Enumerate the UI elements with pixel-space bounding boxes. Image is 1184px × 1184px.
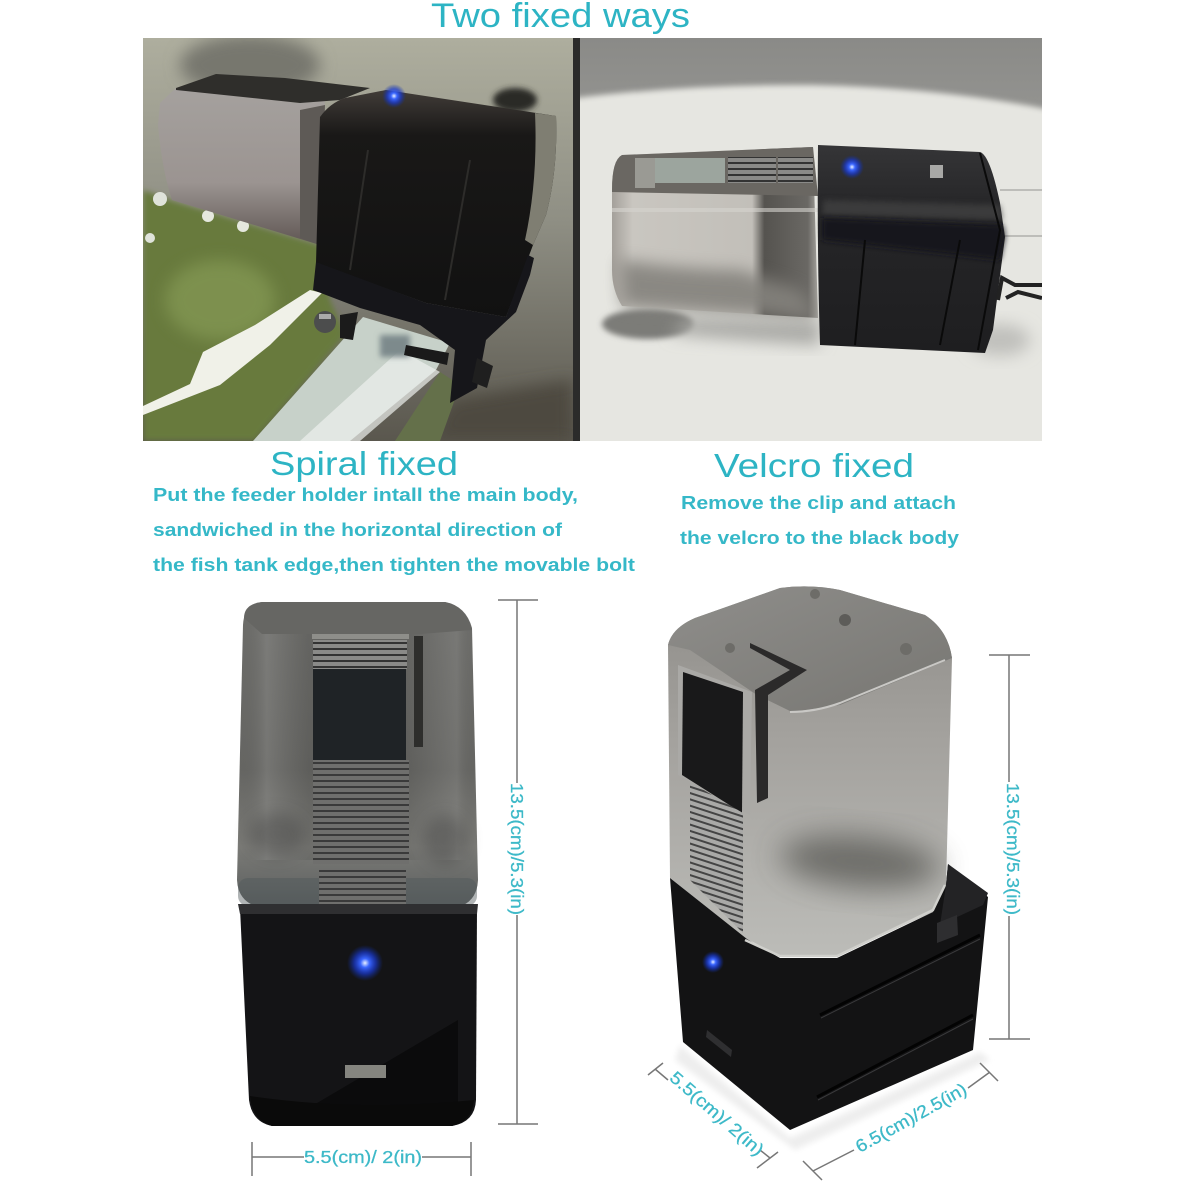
dimension: angled height (989, 655, 1030, 1039)
text block: spiral instructions: the fish tank edge,then tighten the movable bolt (153, 554, 635, 575)
text block: velcro instructions: the velcro to the black body (680, 527, 960, 548)
hopper (612, 147, 818, 318)
dimension: angled left depth (648, 1063, 778, 1168)
text block: spiral instructions (153, 484, 635, 575)
silver hopper (170, 89, 316, 244)
black base (670, 864, 988, 1130)
black body (316, 90, 556, 317)
dimension: front width: 5.5(cm)/ 2(in) (304, 1147, 422, 1167)
clip and bolt (313, 255, 534, 403)
panel: velcro fixed photo (580, 38, 1042, 441)
dimension: angled left depth: 5.5(cm)/ 2(in) (666, 1067, 768, 1160)
dimension: front width (252, 1142, 471, 1176)
text block: spiral instructions: Put the feeder holder intall the main body, (153, 484, 578, 505)
glass rail (253, 317, 450, 441)
dimension: angled right width (803, 1063, 998, 1180)
black base (818, 145, 1005, 353)
text block: velcro instructions: Remove the clip and attach (681, 492, 956, 513)
product: angled view feeder (668, 586, 990, 1150)
dimension: front height: 13.5(cm)/5.3(in) (507, 783, 527, 915)
heading: spiral fixed: Spiral fixed (270, 445, 458, 482)
heading: velcro fixed: Velcro fixed (714, 447, 914, 484)
panel: spiral fixed photo (143, 35, 573, 441)
dimension: front height (498, 600, 538, 1124)
text block: spiral instructions: sandwiched in the horizontal direction of (153, 519, 563, 540)
dimension: angled height: 13.5(cm)/5.3(in) (1003, 783, 1023, 915)
divider strip (573, 38, 580, 441)
text block: velcro instructions (680, 492, 960, 548)
dimension: angled right width: 6.5(cm)/2.5(in) (852, 1079, 970, 1157)
product: front view feeder (237, 602, 478, 1126)
